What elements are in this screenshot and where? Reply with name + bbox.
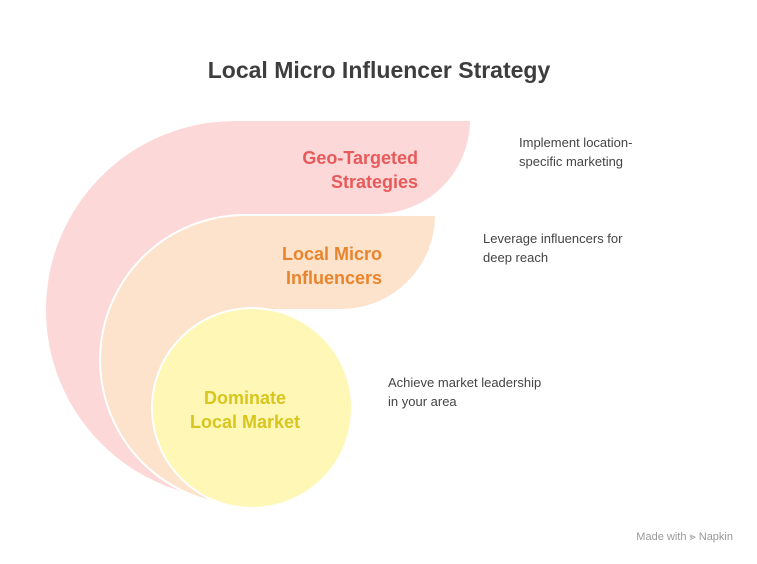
panel: local micro influencers layer (100, 215, 436, 505)
panel: dominate local market circle: Dominate (204, 388, 286, 408)
text block: influencers description: deep reach (483, 250, 548, 265)
panel: geo-targeted strategies layer: Geo-Targeted (302, 148, 418, 168)
panel: dominate local market circle: Local Market (190, 412, 300, 432)
panel: geo-targeted strategies layer (45, 120, 471, 500)
footer credit: Made with ⪢ Napkin (636, 531, 733, 543)
text block: geo description: Implement location- (519, 135, 632, 150)
text block: market description: in your area (388, 394, 457, 409)
panel: local micro influencers layer: Local Micro (282, 244, 382, 264)
title: Local Micro Influencer Strategy (208, 57, 550, 83)
panel: dominate local market circle (152, 308, 352, 508)
text block: geo description: specific marketing (519, 154, 623, 169)
text block: influencers description: Leverage influencers for (483, 231, 622, 246)
panel: local micro influencers layer: Influencers (286, 268, 382, 288)
panel: geo-targeted strategies layer: Strategies (331, 172, 418, 192)
text block: market description: Achieve market leadership (388, 375, 541, 390)
